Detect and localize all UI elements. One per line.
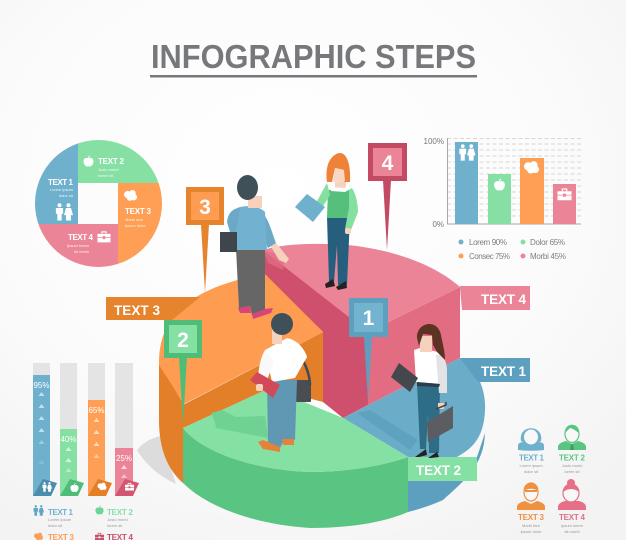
segment: text 3 — [118, 183, 162, 264]
marker 1: 1 — [363, 307, 375, 330]
progress bar 2 — [60, 363, 84, 496]
segment: text 2: TEXT 2 — [98, 157, 125, 166]
avatar: text 2: Justo morbi — [562, 463, 582, 468]
progress bar 4 — [115, 363, 139, 496]
text 2 label — [408, 457, 477, 481]
marker 4: 4 — [382, 152, 394, 175]
segment: text 2: Justo morbi — [98, 167, 119, 172]
avatar: text 2 — [558, 425, 586, 474]
marker 3 — [186, 187, 224, 293]
segment: text 3: Morbi duo — [125, 217, 144, 222]
panel: bar chart: 100% — [424, 137, 444, 146]
segment: text 1: dolor sit — [59, 193, 74, 198]
legend: text 1: Lorem ipsum — [48, 517, 72, 522]
segment: text 3: TEXT 3 — [125, 207, 152, 216]
avatar: text 3: ipsum dolor — [521, 529, 542, 534]
avatar: text 2: lorem sit — [564, 469, 580, 474]
avatar: text 3: Morbi fere — [522, 523, 541, 528]
legend — [458, 238, 566, 261]
person: man with white shirt and shoulder bag — [250, 313, 311, 452]
legend: text 1: TEXT 1 — [48, 508, 74, 517]
avatar: text 4: TEXT 4 — [559, 513, 586, 522]
segment: text 4: Ipsum lorem — [67, 243, 90, 248]
text 1 label: TEXT 1 — [481, 364, 526, 379]
marker 1 — [349, 298, 388, 402]
panel: circular segmented chart — [35, 140, 162, 267]
text 2 label: TEXT 2 — [416, 463, 461, 478]
marker 2 — [164, 320, 202, 425]
segment: text 4: TEXT 4 — [68, 233, 94, 242]
title: INFOGRAPHIC STEPS — [151, 38, 476, 75]
legend: text 2: Justo morbi — [107, 517, 128, 522]
text 4 label: TEXT 4 — [481, 292, 526, 307]
legend: text 2 — [95, 506, 134, 528]
bar: lorem — [455, 142, 478, 224]
segment: text 1: TEXT 1 — [48, 178, 74, 187]
segment: text 1: Lorem ipsum — [50, 187, 74, 192]
avatar: text 3 — [517, 483, 545, 534]
progress bar 1: 95% — [33, 381, 50, 390]
legend: text 2: lorem sit — [107, 523, 123, 528]
pie slice: orange — [159, 274, 323, 483]
avatar: text 4: sit morbi — [564, 529, 580, 534]
segment: text 4 — [38, 224, 118, 267]
avatar: text 1: TEXT 1 — [519, 454, 545, 462]
marker 4 — [368, 143, 407, 250]
segment: text 4: sit morbi — [74, 249, 89, 254]
legend: Dolor 65% — [530, 238, 565, 247]
avatar: text 1: Lorem ipsum — [519, 463, 543, 468]
panel: avatar legend — [517, 425, 586, 534]
pie slice: blue — [343, 358, 485, 512]
avatar: text 1: dolor sit — [524, 469, 539, 474]
legend: text 1: dolor sit — [48, 523, 63, 528]
avatar: text 2: TEXT 2 — [559, 454, 586, 462]
bar: morbi — [553, 184, 576, 224]
legend: Morbi 45% — [530, 252, 566, 261]
text 4 label — [460, 286, 530, 310]
progress bar 2: 40% — [60, 435, 77, 444]
legend: Lorem 90% — [469, 238, 507, 247]
text 3 label: TEXT 3 — [114, 303, 160, 318]
legend: text 2: TEXT 2 — [107, 508, 134, 517]
pie slice: pink — [263, 244, 460, 418]
segment: text 1 — [35, 144, 78, 224]
text 3 label — [106, 297, 200, 320]
segment: text 3: ipsum dolor — [125, 223, 146, 228]
panel: bar chart — [424, 137, 581, 261]
progress bar 1 — [33, 363, 57, 496]
text 1 label — [460, 358, 530, 382]
segment: text 2 — [78, 140, 158, 183]
person: woman with briefcase — [391, 324, 453, 458]
avatar: text 4 — [558, 479, 586, 534]
avatar: text 4: Ipsum lorem — [561, 523, 584, 528]
segment: text 2: lorem sit — [98, 173, 114, 178]
bar: consec — [520, 158, 544, 224]
legend: Consec 75% — [469, 252, 510, 261]
legend: text 1 — [34, 505, 74, 528]
panel: vertical progress bars — [33, 363, 139, 540]
progress bar 3: 65% — [88, 406, 105, 415]
person: woman with green sweater — [295, 153, 358, 290]
legend: text 3 — [34, 533, 75, 540]
progress bar 4: 25% — [116, 454, 132, 463]
marker 3: 3 — [199, 196, 211, 219]
person: man with blue sweater — [220, 175, 289, 319]
pie slice: green — [183, 388, 408, 528]
avatar: text 1 — [518, 428, 545, 474]
legend: text 4 — [95, 533, 134, 540]
panel: bar chart: 0% — [432, 220, 444, 229]
progress bar 3 — [88, 363, 112, 496]
bar: dolor — [488, 174, 511, 224]
panel: 3D pie chart — [106, 244, 530, 528]
avatar: text 3: TEXT 3 — [518, 513, 545, 522]
marker 2: 2 — [177, 329, 189, 352]
